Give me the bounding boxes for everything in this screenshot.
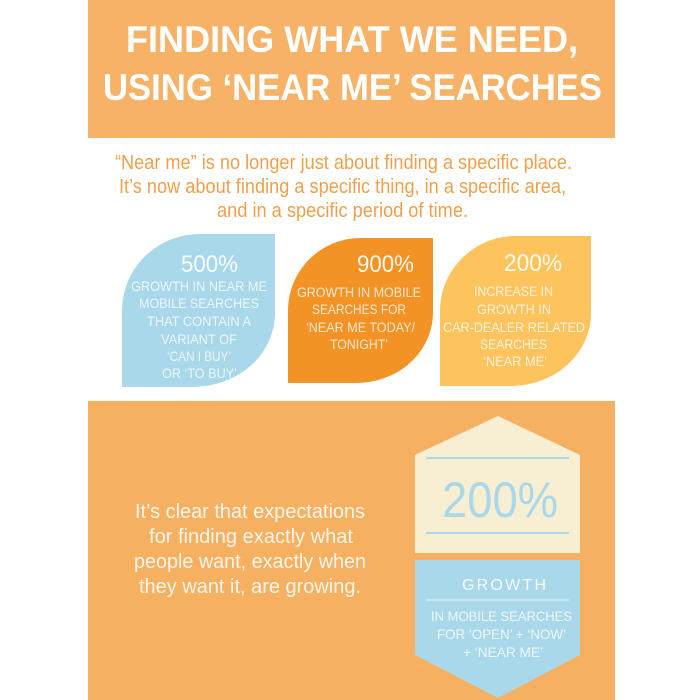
panel: 500% stat leaf: MOBILE SEARCHES (139, 295, 259, 311)
panel: 500% stat leaf: ‘CAN I BUY’ (167, 348, 231, 364)
badge: 200% house shape: 200% (442, 472, 558, 528)
body text block: they want it, are growing. (139, 576, 361, 598)
body text block (134, 501, 366, 598)
title (103, 19, 602, 108)
badge: 200% house shape (415, 416, 580, 553)
badge: growth pennant: GROWTH (462, 577, 546, 594)
panel: 200% stat leaf: INCREASE IN (474, 283, 553, 299)
panel: 500% stat leaf: GROWTH IN NEAR ME (131, 278, 267, 294)
body text block: people want, exactly when (134, 551, 366, 573)
badge: growth pennant: IN MOBILE SEARCHES (431, 608, 572, 624)
badge: growth pennant (415, 560, 580, 698)
body text block: It’s clear that expectations (135, 501, 365, 523)
panel: 200% stat leaf (440, 236, 591, 386)
panel: 200% stat leaf: SEARCHES (480, 336, 547, 352)
panel: title banner (88, 0, 615, 138)
panel: 200% stat leaf: GROWTH IN (477, 301, 551, 317)
panel: 200% stat leaf: 200% (504, 250, 562, 277)
panel: 200% stat leaf: CAR-DEALER RELATED (443, 319, 585, 335)
panel: 200% stat leaf: ‘NEAR ME’ (483, 353, 547, 369)
panel: 900% stat leaf: 900% (357, 251, 414, 278)
panel: 900% stat leaf: ‘NEAR ME TODAY/ (306, 319, 415, 335)
badge: growth pennant: + ‘NEAR ME’ (463, 644, 543, 660)
intro text block: It’s now about finding a specific thing, in a specific area, (119, 176, 566, 198)
panel: 500% stat leaf: THAT CONTAIN A (147, 313, 252, 329)
panel: 500% stat leaf: OR ‘TO BUY’ (162, 365, 237, 381)
panel: 900% stat leaf: SEARCHES FOR (312, 301, 406, 317)
panel: 500% stat leaf: VARIANT OF (161, 331, 237, 347)
body text block: for finding exactly what (149, 526, 353, 548)
panel: 900% stat leaf (288, 238, 433, 383)
intro text block: and in a specific period of time. (217, 200, 468, 222)
title: USING ‘NEAR ME’ SEARCHES (103, 67, 602, 108)
badge: growth pennant: FOR ‘OPEN’ + ‘NOW’ (437, 626, 566, 642)
intro text block (115, 152, 572, 222)
panel: 900% stat leaf: GROWTH IN MOBILE (297, 284, 421, 300)
title: FINDING WHAT WE NEED, (126, 19, 578, 60)
panel: 500% stat leaf (122, 234, 275, 387)
panel: 900% stat leaf: TONIGHT’ (330, 336, 388, 352)
panel: 500% stat leaf: 500% (181, 251, 238, 278)
intro text block: “Near me” is no longer just about finding a specific place. (115, 152, 572, 174)
panel: lower section (88, 401, 615, 700)
